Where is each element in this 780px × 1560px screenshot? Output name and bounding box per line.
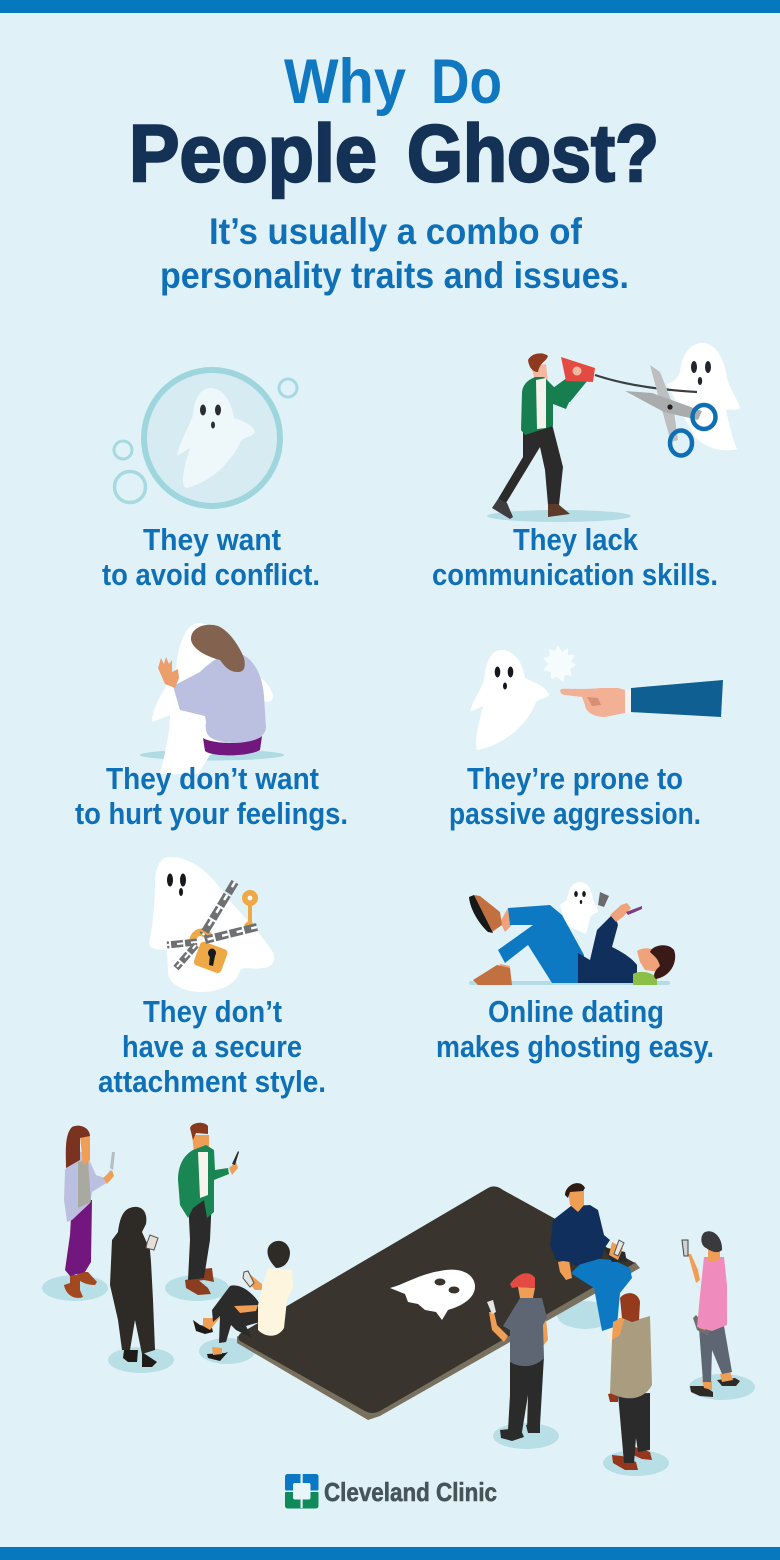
- subtitle: personality traits and issues.: [160, 255, 629, 296]
- label: communication skills: [432, 522, 718, 592]
- person: seated woman with phone: [193, 1241, 293, 1361]
- label: communication skills: They lack: [513, 522, 639, 557]
- giant phone with ghost: [237, 1186, 640, 1420]
- icon: ghost in chains: [149, 857, 274, 992]
- panel: online dating: [436, 882, 714, 1064]
- icon: ghost: [470, 650, 549, 750]
- label: hurt your feelings: [75, 761, 348, 831]
- subtitle: [160, 211, 629, 296]
- title: People: [129, 109, 377, 199]
- title: Why: [284, 47, 406, 117]
- label: online dating: Online dating: [488, 994, 664, 1029]
- person: seated man in navy: [550, 1183, 632, 1344]
- icon: ghost on phone: [390, 1270, 475, 1320]
- label: hurt your feelings: They don’t want: [106, 761, 319, 796]
- icon: impact burst: [543, 645, 576, 682]
- illustration: man with tin can: [487, 353, 631, 522]
- panel: secure attachment: [98, 857, 326, 1099]
- label: secure attachment: have a secure: [122, 1029, 302, 1064]
- person: woman in pink: [682, 1231, 740, 1397]
- label: online dating: makes ghosting easy.: [436, 1029, 714, 1064]
- person: man in green cardigan: [178, 1123, 239, 1295]
- label: avoid conflict: [102, 522, 320, 592]
- person: woman with phone, lavender top: [64, 1126, 115, 1298]
- title: [129, 47, 659, 199]
- logo: Cleveland Clinic: [285, 1474, 497, 1508]
- label: avoid conflict: They want: [143, 522, 281, 557]
- label: avoid conflict: to avoid conflict.: [102, 557, 320, 592]
- label: online dating: [436, 994, 714, 1064]
- label: communication skills: communication skills.: [432, 557, 718, 592]
- label: passive aggression: They’re prone to: [467, 761, 683, 796]
- illustration: person on phone lying down: [469, 882, 675, 985]
- label: passive aggression: passive aggression.: [449, 796, 701, 831]
- panel: avoid conflict: [102, 370, 320, 592]
- icon: woman hugging ghost: [140, 623, 284, 774]
- title: Ghost?: [407, 109, 659, 199]
- person: woman in black: [110, 1207, 158, 1367]
- illustration: people around giant phone: [42, 1123, 755, 1476]
- panel: hurt your feelings: [75, 623, 348, 831]
- panel: passive aggression: [449, 645, 723, 831]
- label: secure attachment: [98, 994, 326, 1099]
- icon: pointing hand: [560, 680, 723, 717]
- logo mark: [285, 1474, 318, 1508]
- label: secure attachment: They don’t: [143, 994, 282, 1029]
- logo wordmark: Cleveland Clinic: [324, 1477, 497, 1507]
- person: man with tan shirt: [608, 1293, 652, 1470]
- label: passive aggression: [449, 761, 701, 831]
- floor shadows: [42, 1275, 755, 1476]
- icon: ghost with scissors: [595, 343, 740, 456]
- panel: communication skills: [432, 343, 740, 592]
- label: secure attachment: attachment style.: [98, 1064, 326, 1099]
- subtitle: It’s usually a combo of: [209, 211, 583, 252]
- person: man with red cap: [487, 1273, 548, 1441]
- label: hurt your feelings: to hurt your feelings.: [75, 796, 348, 831]
- title: Do: [431, 47, 502, 117]
- icon: ghost in bubble: [114, 370, 297, 506]
